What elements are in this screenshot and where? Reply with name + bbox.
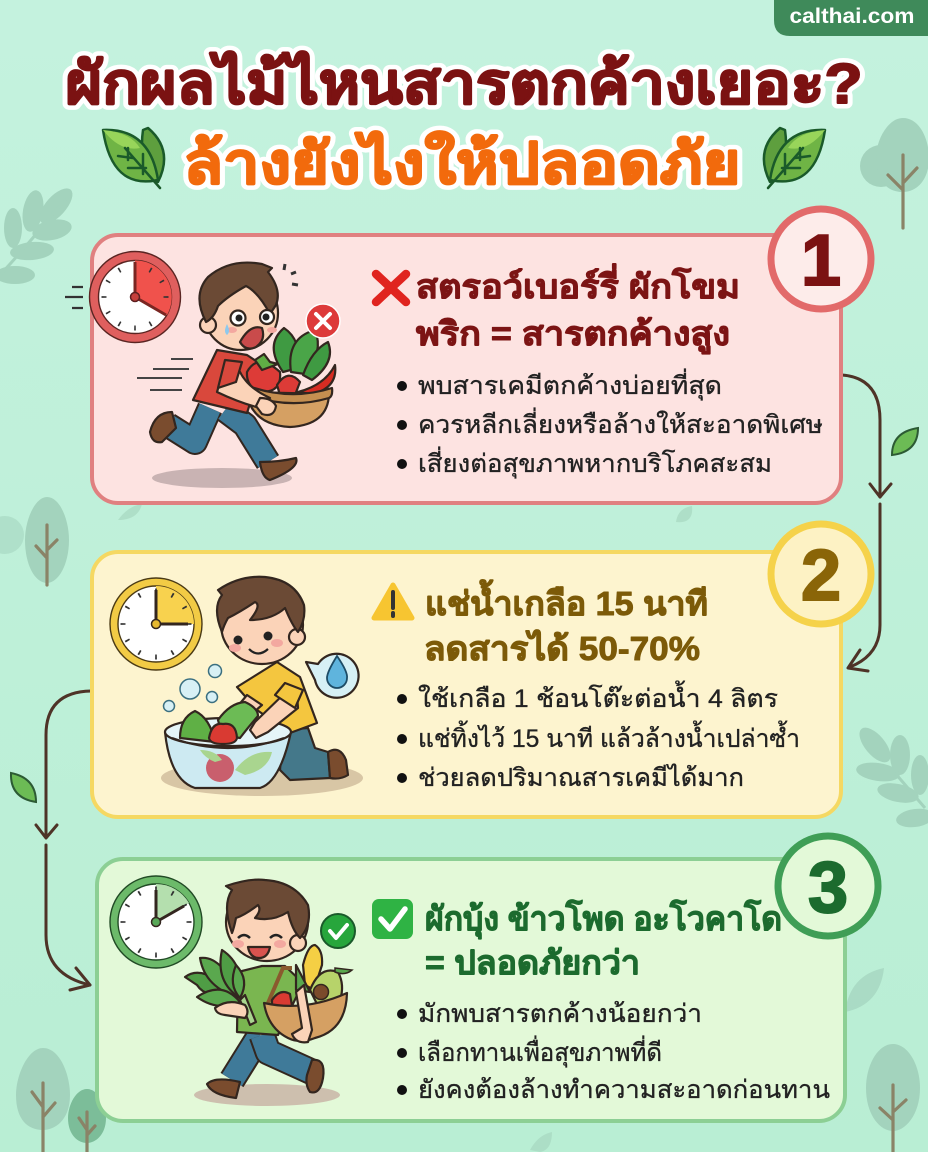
bullet list card 2 [397, 680, 800, 792]
badge 3 [778, 836, 878, 936]
title: ล้างยังไงให้ปลอดภัย [184, 130, 740, 196]
heading card 1 [416, 263, 740, 355]
panel: card 2 salt soak [92, 552, 841, 817]
heading card 3 [425, 899, 782, 981]
character: running boy with basket [137, 263, 340, 488]
bullet list card 2: ใช้เกลือ 1 ช้อนโต๊ะต่อน้ำ 4 ลิตร [418, 680, 778, 713]
heading card 2: ลดสารได้ 50-70% [424, 629, 700, 667]
bullet list card 3: เลือกทานเพื่อสุขภาพที่ดี [418, 1035, 662, 1068]
icon: title leaf left [103, 128, 164, 188]
badge 1 [771, 209, 871, 309]
title: ล้างยังไงให้ปลอดภัย [184, 130, 740, 196]
bullet list card 1: พบสารเคมีตกค้างบ่อยที่สุด [418, 368, 722, 401]
bullet list card 1: ควรหลีกเลี่ยงหรือล้างให้สะอาดพิเศษ [418, 407, 823, 439]
badge 3: 3 [808, 848, 848, 928]
arrow: card 1 to card 2 [842, 375, 891, 671]
heading card 2: แช่น้ำเกลือ 15 นาที [425, 579, 708, 622]
bullet list card 1 [397, 368, 823, 479]
panel: card 3 safer produce [97, 859, 845, 1121]
bullet list card 3: มักพบสารตกค้างน้อยกว่า [418, 1000, 702, 1028]
title: ผักผลไม้ไหนสารตกค้างเยอะ? [66, 51, 862, 116]
title [66, 51, 862, 196]
icon: side leaf right [892, 428, 918, 455]
bullet list card 2: ช่วยลดปริมาณสารเคมีได้มาก [418, 763, 744, 792]
icon: title leaf right [764, 128, 825, 188]
bullet list card 3: ยังคงต้องล้างทำความสะอาดก่อนทาน [418, 1076, 830, 1104]
heading card 3: = ปลอดภัยกว่า [425, 944, 640, 981]
icon: clock green [110, 876, 202, 968]
character: boy washing vegetables [161, 577, 363, 796]
bullet list card 1: เสี่ยงต่อสุขภาพหากบริโภคสะสม [418, 446, 772, 479]
badge 2: 2 [801, 536, 841, 616]
heading card 3: ผักบุ้ง ข้าวโพด อะโวคาโด [425, 899, 782, 940]
icon: red cross [376, 274, 406, 302]
heading card 1: พริก = สารตกค้างสูง [416, 315, 730, 355]
heading card 1: สตรอว์เบอร์รี่ ผักโขม [416, 263, 740, 305]
heading card 2 [424, 579, 708, 667]
badge 1: 1 [801, 221, 841, 301]
icon: clock red [65, 252, 180, 342]
icon: green check box [372, 899, 413, 939]
arrow: card 2 to card 3 [36, 691, 91, 990]
site tab: calthai.com: calthai.com [790, 5, 914, 28]
panel: card 1 high residue [65, 235, 841, 503]
icon: clock yellow [110, 578, 202, 670]
bullet list card 2: แช่ทิ้งไว้ 15 นาที แล้วล้างน้ำเปล่าซ้ำ [418, 720, 800, 753]
character: happy boy with vegetables [185, 880, 355, 1106]
icon: warning triangle [374, 585, 412, 618]
title: ผักผลไม้ไหนสารตกค้างเยอะ? [66, 51, 862, 116]
icon: side leaf left [11, 773, 36, 802]
bullet list card 3 [397, 1000, 830, 1104]
badge 2 [771, 524, 871, 624]
site tab: calthai.com [774, 0, 928, 36]
